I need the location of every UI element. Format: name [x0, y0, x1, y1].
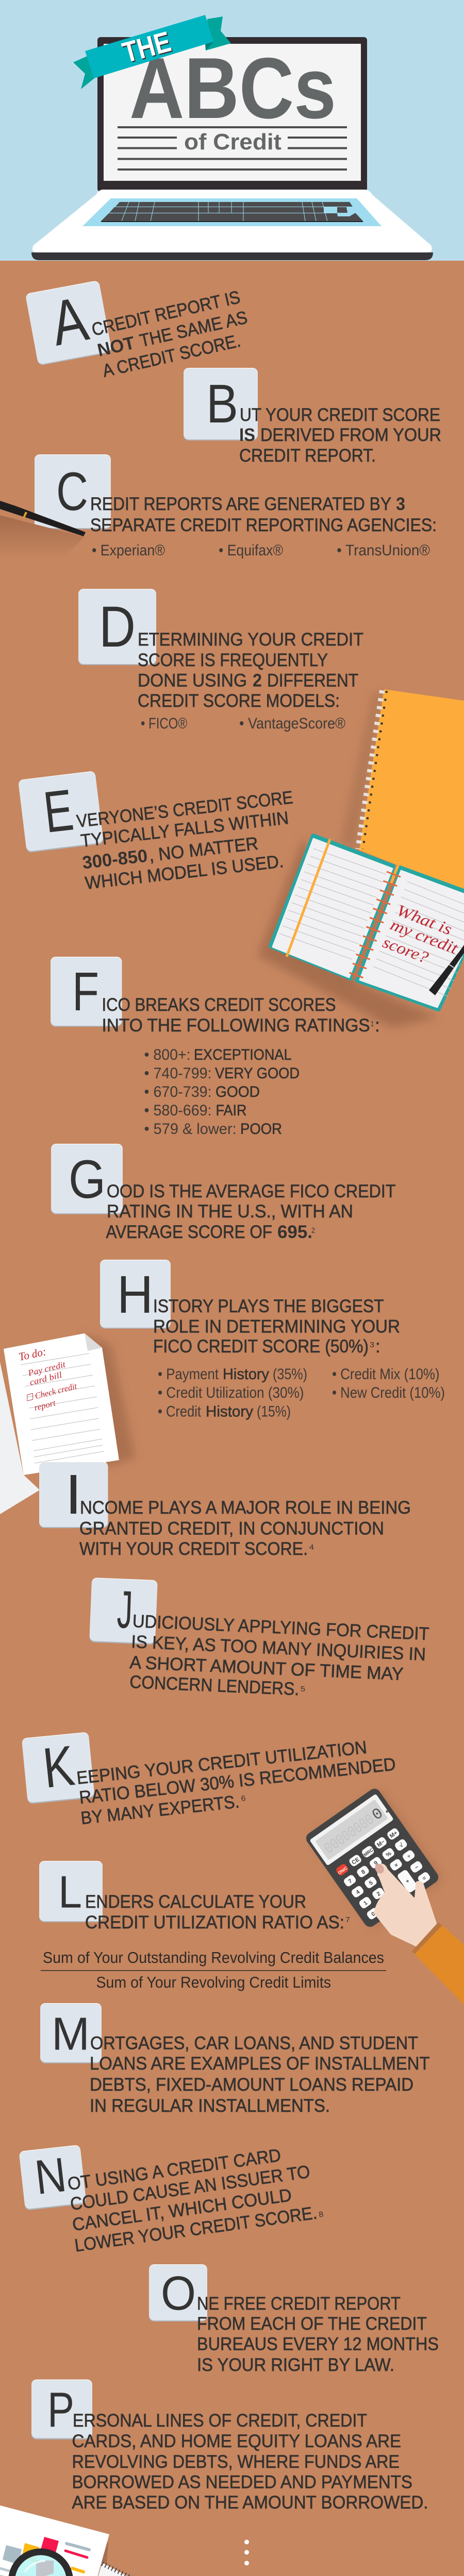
- text I: NCOME PLAYS A MAJOR ROLE IN BEING: [80, 1498, 411, 1518]
- text J: 5: [301, 1685, 305, 1693]
- icon: orange spiral notebook: [340, 689, 464, 891]
- entry D: [78, 589, 363, 732]
- calculator display: 00000000: [321, 1811, 378, 1858]
- text D: DIFFERENT: [267, 671, 358, 690]
- text C: [90, 494, 437, 535]
- handwritten note: [380, 901, 461, 967]
- to-do handwriting: ☐ Check credit: [24, 1381, 78, 1403]
- text H: 3: [370, 1341, 374, 1349]
- list: score models: [141, 715, 345, 732]
- entry C: [0, 454, 437, 560]
- text D: ETERMINING YOUR CREDIT: [138, 630, 363, 650]
- text I: WITH YOUR CREDIT SCORE.: [79, 1539, 308, 1559]
- text G: 2: [311, 1226, 315, 1235]
- calculator keys: 5: [368, 1879, 374, 1887]
- text P: ARE BASED ON THE AMOUNT BORROWED.: [72, 2493, 428, 2513]
- letter I: [71, 1475, 76, 1514]
- to-do handwriting: Pay credit: [26, 1359, 67, 1378]
- calculator keys: ÷: [406, 1853, 412, 1860]
- text M: ORTGAGES, CAR LOANS, AND STUDENT: [90, 2033, 418, 2054]
- list: credit reporting agencies: • Equifax®: [219, 542, 283, 559]
- calculator keys: M+: [389, 1830, 399, 1839]
- list: FICO ratings: FAIR: [216, 1102, 246, 1119]
- to-do handwriting: [18, 1345, 78, 1413]
- text M: DEBTS, FIXED-AMOUNT LOANS REPAID: [90, 2075, 413, 2095]
- text M: LOANS ARE EXAMPLES OF INSTALLMENT: [90, 2054, 430, 2074]
- list: credit reporting agencies: • TransUnion®: [337, 542, 430, 559]
- text K: BY MANY EXPERTS.: [80, 1791, 240, 1828]
- text D: SCORE IS FREQUENTLY: [138, 650, 328, 670]
- icon: calculator with hand: [304, 1786, 464, 2005]
- list: score factors: History: [223, 1366, 269, 1383]
- list: score factors: • Payment: [158, 1366, 219, 1383]
- icon: to-do notes: [0, 1333, 135, 1514]
- text O: [197, 2294, 439, 2375]
- calculator keys: 6: [380, 1871, 387, 1878]
- letter tile J: [89, 1578, 158, 1645]
- text O: IS YOUR RIGHT BY LAW.: [197, 2355, 394, 2375]
- text J: [129, 1611, 429, 1699]
- text C: REDIT REPORTS ARE GENERATED BY: [90, 494, 391, 514]
- text J: CONCERN LENDERS.: [129, 1672, 300, 1699]
- calculator keys: +: [405, 1878, 411, 1885]
- text A: NOT: [95, 333, 137, 361]
- text H: ISTORY PLAYS THE BIGGEST: [153, 1296, 384, 1316]
- calculator keys: M−: [376, 1839, 386, 1849]
- text N: LOWER YOUR CREDIT SCORE.: [73, 2202, 318, 2256]
- notepad: [75, 2563, 141, 2576]
- back sheet: [0, 1362, 40, 1514]
- list: score factors: (35%): [273, 1366, 307, 1383]
- text N: COULD CAUSE AN ISSUER TO: [69, 2162, 311, 2214]
- text B: UT YOUR CREDIT SCORE: [240, 405, 440, 425]
- list: score factors: • Credit: [158, 1403, 202, 1420]
- text D: CREDIT SCORE MODELS:: [138, 691, 340, 711]
- calculator keys: 7: [347, 1878, 353, 1885]
- icon: open teal notebook: [258, 836, 464, 1028]
- text G: OOD IS THE AVERAGE FICO CREDIT: [107, 1181, 396, 1201]
- text O: FROM EACH OF THE CREDIT: [197, 2314, 427, 2334]
- keyboard: [101, 202, 363, 222]
- title: ABCs: ABCs: [129, 40, 336, 137]
- text D: [138, 630, 363, 711]
- letter tile E: [18, 771, 104, 853]
- entry N: [19, 2145, 324, 2256]
- text A: A CREDIT SCORE.: [101, 331, 242, 381]
- formula: credit utilization ratio: [41, 1948, 386, 1991]
- letter H: H: [117, 1265, 153, 1324]
- report sheet: [0, 2505, 109, 2576]
- text H: FICO CREDIT SCORE (50%): [153, 1336, 369, 1357]
- text F: ICO BREAKS CREDIT SCORES: [102, 995, 336, 1015]
- hand: [373, 1862, 438, 1948]
- text G: [106, 1181, 396, 1242]
- report chart and lines: [0, 2537, 89, 2576]
- list: FICO ratings: GOOD: [216, 1083, 260, 1100]
- letter tile C: [35, 454, 111, 529]
- list: FICO ratings: [144, 1046, 300, 1138]
- letter D: D: [99, 595, 136, 659]
- left page: [273, 839, 392, 977]
- entry M: [40, 2003, 430, 2116]
- letter tile N: [19, 2145, 87, 2211]
- screen rules: [118, 126, 347, 171]
- calculator keys: 8: [360, 1869, 367, 1876]
- calculator display: [309, 1792, 397, 1866]
- text H: [153, 1296, 400, 1357]
- calculator display: 0.: [369, 1800, 394, 1825]
- entry I: [39, 1462, 411, 1559]
- list: score factors: (15%): [257, 1403, 291, 1420]
- text E: TYPICALLY FALLS WITHIN: [80, 808, 290, 851]
- icon: report with magnifying glass: [0, 2505, 141, 2576]
- to-do handwriting: report: [33, 1398, 57, 1413]
- formula: credit utilization ratio: Sum of Your Outstanding Revolving Credit Balances: [43, 1948, 384, 1967]
- text I: GRANTED CREDIT, IN CONJUNCTION: [79, 1519, 384, 1538]
- header: laptop illustration with title: [31, 15, 433, 260]
- text P: BORROWED AS NEEDED AND PAYMENTS: [72, 2472, 412, 2493]
- letter J: J: [116, 1580, 134, 1639]
- notebook cover: [271, 836, 464, 1009]
- calculator keys: 3: [388, 1882, 394, 1889]
- text K: [76, 1737, 396, 1828]
- list: score factors: • New Credit (10%): [332, 1384, 445, 1401]
- letter P: P: [47, 2382, 74, 2437]
- text L: [85, 1892, 350, 1933]
- entry O: [149, 2264, 439, 2375]
- calculator keys: 4: [355, 1889, 361, 1896]
- pen on notebook: [429, 945, 464, 995]
- handwritten note: What is: [394, 901, 455, 939]
- text E: , NO MATTER: [148, 833, 259, 866]
- text P: [72, 2411, 428, 2513]
- text E: 300-850: [81, 846, 148, 873]
- text K: 6: [241, 1794, 246, 1803]
- text F: :: [375, 1015, 380, 1036]
- icon: pen with shadow: [0, 501, 86, 560]
- ribbon text: THE: THE: [120, 26, 175, 70]
- letter C: C: [56, 462, 88, 522]
- text A: THE SAME AS: [138, 307, 249, 351]
- entry B: [184, 368, 441, 466]
- text G: AVERAGE SCORE OF: [106, 1222, 272, 1242]
- calculator keys: .: [384, 1902, 389, 1908]
- letter tile K: [22, 1732, 95, 1804]
- text L: ENDERS CALCULATE YOUR: [85, 1892, 306, 1912]
- letter F: F: [72, 961, 99, 1022]
- orange strap: [287, 839, 330, 957]
- spiral binding: [349, 872, 401, 978]
- letter tile P: [31, 2379, 92, 2439]
- letter tile O: [149, 2264, 207, 2321]
- calculator keys: =: [421, 1875, 427, 1882]
- text K: RATIO BELOW 30% IS RECOMMENDED: [78, 1754, 396, 1808]
- text N: CANCEL IT, WHICH COULD: [71, 2185, 293, 2235]
- entry L: [39, 1861, 386, 1991]
- text O: BUREAUS EVERY 12 MONTHS: [197, 2334, 439, 2354]
- text B: CREDIT REPORT.: [239, 446, 376, 466]
- laptop screen: [97, 37, 367, 192]
- text J: UDICIOUSLY APPLYING FOR CREDIT: [132, 1611, 429, 1644]
- text B: IS: [239, 425, 255, 445]
- text B: DERIVED FROM YOUR: [260, 425, 441, 445]
- text E: [76, 787, 294, 893]
- calculator keys: MRC: [362, 1847, 374, 1857]
- text F: INTO THE FOLLOWING RATINGS: [102, 1015, 370, 1036]
- text L: CREDIT UTILIZATION RATIO AS:: [85, 1912, 344, 1933]
- handwritten note: my credit: [388, 915, 461, 958]
- shadows: [0, 2514, 108, 2576]
- text N: [67, 2145, 324, 2256]
- letter L: L: [58, 1866, 82, 1918]
- text G: 695.: [277, 1222, 312, 1242]
- letter N: N: [32, 2147, 69, 2205]
- list: FICO ratings: EXCEPTIONAL: [194, 1046, 292, 1063]
- letter tile M: [40, 2003, 102, 2063]
- calculator keys: CE: [351, 1856, 361, 1866]
- text N: OT USING A CREDIT CARD: [67, 2145, 282, 2194]
- list: FICO ratings: • 740-799:: [144, 1065, 211, 1082]
- text D: DONE USING: [138, 671, 247, 690]
- list: credit reporting agencies: [92, 542, 430, 559]
- letter tile F: [51, 957, 122, 1027]
- text K: EEPING YOUR CREDIT UTILIZATION: [76, 1737, 368, 1788]
- text L: 7: [345, 1916, 350, 1924]
- letter G: G: [69, 1149, 106, 1210]
- list: score factors: • Credit Mix (10%): [332, 1366, 439, 1383]
- to-do sheet: [4, 1333, 119, 1475]
- calculator keys: 2: [376, 1891, 382, 1897]
- list: FICO ratings: POOR: [240, 1121, 282, 1138]
- ellipsis dots: [244, 2540, 249, 2566]
- letter B: B: [206, 374, 238, 434]
- calculator keys: ×: [393, 1862, 400, 1869]
- calculator keys: 9: [373, 1860, 379, 1867]
- list: FICO ratings: VERY GOOD: [215, 1065, 300, 1082]
- text B: [239, 405, 441, 466]
- entry K: [22, 1732, 396, 1828]
- text A: [90, 287, 249, 381]
- text F: [102, 995, 380, 1036]
- text I: [79, 1498, 411, 1559]
- text J: A SHORT AMOUNT OF TIME MAY: [129, 1652, 404, 1684]
- list: FICO ratings: • 670-739:: [144, 1083, 211, 1100]
- letter O: O: [161, 2266, 196, 2320]
- text C: SEPARATE CREDIT REPORTING AGENCIES:: [90, 515, 437, 535]
- list: FICO ratings: • 800+:: [144, 1046, 191, 1063]
- to-do handwriting: card bill: [28, 1370, 63, 1387]
- calculator keys: √: [399, 1842, 405, 1849]
- list: score factors: History: [206, 1403, 253, 1420]
- calculator keys: 1: [362, 1900, 369, 1907]
- letter tile I: [39, 1462, 108, 1528]
- handwritten note: score?: [380, 933, 431, 967]
- text P: ERSONAL LINES OF CREDIT, CREDIT: [73, 2411, 367, 2431]
- paper shadow: [46, 1334, 135, 1479]
- list: score models: • VantageScore®: [239, 715, 345, 732]
- calculator keys: 0: [370, 1911, 376, 1918]
- formula: credit utilization ratio: Sum of Your Revolving Credit Limits: [96, 1973, 331, 1991]
- entry F: [51, 957, 380, 1138]
- title: of Credit: of Credit: [184, 129, 281, 155]
- text P: CARDS, AND HOME EQUITY LOANS ARE: [72, 2431, 401, 2451]
- letter tile H: [100, 1260, 171, 1329]
- list: score factors: [158, 1366, 445, 1420]
- text D: 2: [253, 671, 262, 690]
- laptop base: [31, 190, 433, 260]
- list: score factors: • Credit Utilization (30%): [158, 1384, 304, 1401]
- entry H: [100, 1260, 445, 1420]
- text I: 4: [309, 1543, 314, 1552]
- text G: RATING IN THE U.S., WITH AN: [107, 1201, 353, 1222]
- text J: IS KEY, AS TOO MANY INQUIRIES IN: [131, 1632, 426, 1665]
- letter M: M: [52, 2008, 90, 2060]
- letter tile G: [51, 1144, 123, 1214]
- sleeve: [412, 1922, 464, 2005]
- calculator: [304, 1786, 441, 1929]
- entry J: [89, 1578, 429, 1699]
- text E: WHICH MODEL IS USED.: [84, 851, 285, 893]
- list: score models: • FICO®: [141, 715, 187, 732]
- text M: IN REGULAR INSTALLMENTS.: [90, 2096, 330, 2116]
- text H: ROLE IN DETERMINING YOUR: [153, 1317, 400, 1336]
- letter tile L: [39, 1861, 103, 1922]
- entry P: [31, 2379, 428, 2513]
- list: credit reporting agencies: • Experian®: [92, 542, 165, 559]
- list: FICO ratings: • 580-669:: [144, 1102, 211, 1119]
- right page: [360, 871, 464, 1007]
- calculator keys: %: [385, 1851, 393, 1858]
- entry G: [51, 1144, 396, 1242]
- text H: :: [375, 1336, 380, 1357]
- ribbon text: THE: THE: [119, 25, 174, 69]
- calculator keys: ON/C: [337, 1866, 349, 1875]
- text N: 8: [318, 2210, 324, 2219]
- text C: 3: [396, 494, 405, 514]
- letter E: E: [40, 777, 76, 845]
- entry E: [18, 771, 294, 893]
- to-do handwriting: To do:: [18, 1345, 47, 1363]
- calculator keys: −: [413, 1864, 420, 1871]
- text A: CREDIT REPORT IS: [90, 287, 242, 340]
- text F: 1: [371, 1020, 374, 1028]
- text O: NE FREE CREDIT REPORT: [197, 2294, 401, 2314]
- text P: REVOLVING DEBTS, WHERE FUNDS ARE: [72, 2452, 400, 2472]
- letter tile A: [25, 280, 112, 366]
- text M: [90, 2033, 430, 2116]
- text E: VERYONE’S CREDIT SCORE: [76, 787, 294, 832]
- letter A: A: [45, 283, 93, 359]
- list: FICO ratings: • 579 & lower:: [144, 1121, 236, 1138]
- letter K: K: [40, 1734, 77, 1800]
- letter tile B: [184, 368, 258, 440]
- entry A: [25, 280, 249, 381]
- ribbon: [73, 15, 231, 89]
- letter tile D: [78, 589, 156, 665]
- calculator keys: [335, 1827, 431, 1921]
- magnifying glass: [11, 2552, 81, 2576]
